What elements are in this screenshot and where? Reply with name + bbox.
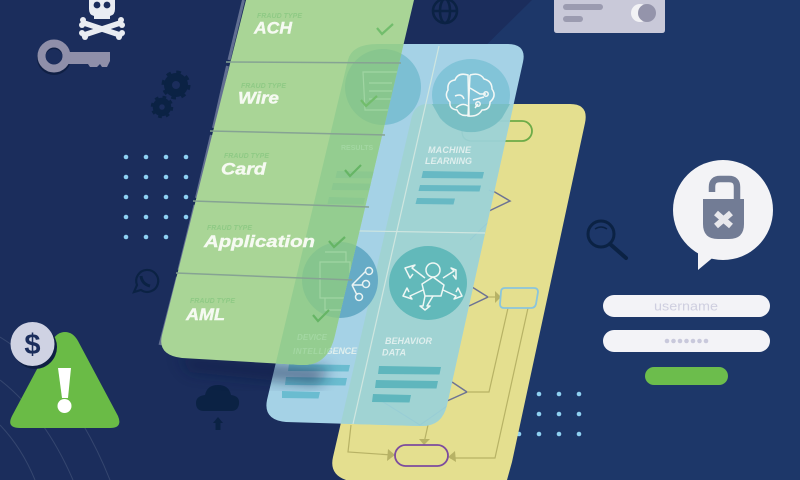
password field [603,330,770,352]
card edge [160,0,244,345]
row: ACH [253,13,393,38]
circle: behavior [389,246,467,320]
icon: warning triangle with dollar: $ [24,329,41,361]
open padlock [703,179,744,239]
label: device intelligence: INTELLIGENCE [293,346,358,356]
panel: blue data sources card [266,44,524,426]
flow connectors [348,297,528,458]
circle: brain [432,59,510,132]
row: Card [221,153,361,178]
row: Wire: Wire [238,88,279,108]
circle: document [345,49,421,125]
label: behavior data [382,336,432,358]
overlap with blue card: DEVICE [297,333,328,342]
text bars: device intelligence [282,364,350,398]
row: AML: AML [185,305,225,324]
icon: credit card [554,0,665,33]
flow arrowheads [387,291,501,462]
decision branch upper [489,191,510,211]
username field: username [654,298,718,314]
row: AML [185,298,329,324]
row: ACH: FRAUD TYPE [257,13,302,20]
row: Wire: FRAUD TYPE [241,83,286,90]
icon: globe [433,0,457,23]
decision branch middle [469,287,488,306]
overlap with blue card: INTELLIGENCE [293,347,358,356]
text bars: machine learning [416,171,484,204]
label: device intelligence: DEVICE [297,332,328,342]
row: Application: FRAUD TYPE [207,225,252,232]
overlap with blue card [276,44,404,365]
username field [603,295,770,317]
icon: gears [152,72,188,116]
label: behavior data: BEHAVIOR [385,336,432,346]
icon: cloud upload [196,385,239,430]
label: behavior data: DATA [382,348,406,358]
circle: device [302,242,378,318]
row: Application: Application [203,232,315,251]
row: AML: FRAUD TYPE [190,298,235,305]
column dividers [300,46,485,424]
panel: yellow flowchart card [332,104,586,480]
login form [603,295,770,385]
icon: speech bubble with open lock [673,160,773,270]
flowchart start pill [462,121,532,141]
flowchart process box [500,288,538,308]
label: machine learning [425,145,472,166]
flowchart end pill [395,445,448,466]
row: Card: FRAUD TYPE [224,153,269,160]
label: device intelligence [293,332,358,356]
label: machine learning: LEARNING [425,156,472,166]
submit button [645,367,728,385]
icon: whatsapp [134,270,158,292]
overlap with blue card: RESULTS [341,145,373,152]
row: ACH: ACH [253,18,293,38]
row separators [176,62,401,280]
icon: key [41,44,110,71]
row: Application [203,225,345,251]
text bars: behavior data [372,366,441,402]
icon: magnifying glass [588,221,626,258]
dot grid left [124,155,188,239]
decision branch lower [447,382,467,401]
row: Card: Card [221,160,267,178]
icon: warning triangle with dollar [10,322,119,428]
panel: green fraud types card [158,0,414,365]
card shadow [178,356,330,385]
icon: skull and crossbones [79,0,125,40]
dot grid right [517,392,581,436]
row: Wire [238,83,377,108]
label: machine learning: MACHINE [428,145,472,155]
